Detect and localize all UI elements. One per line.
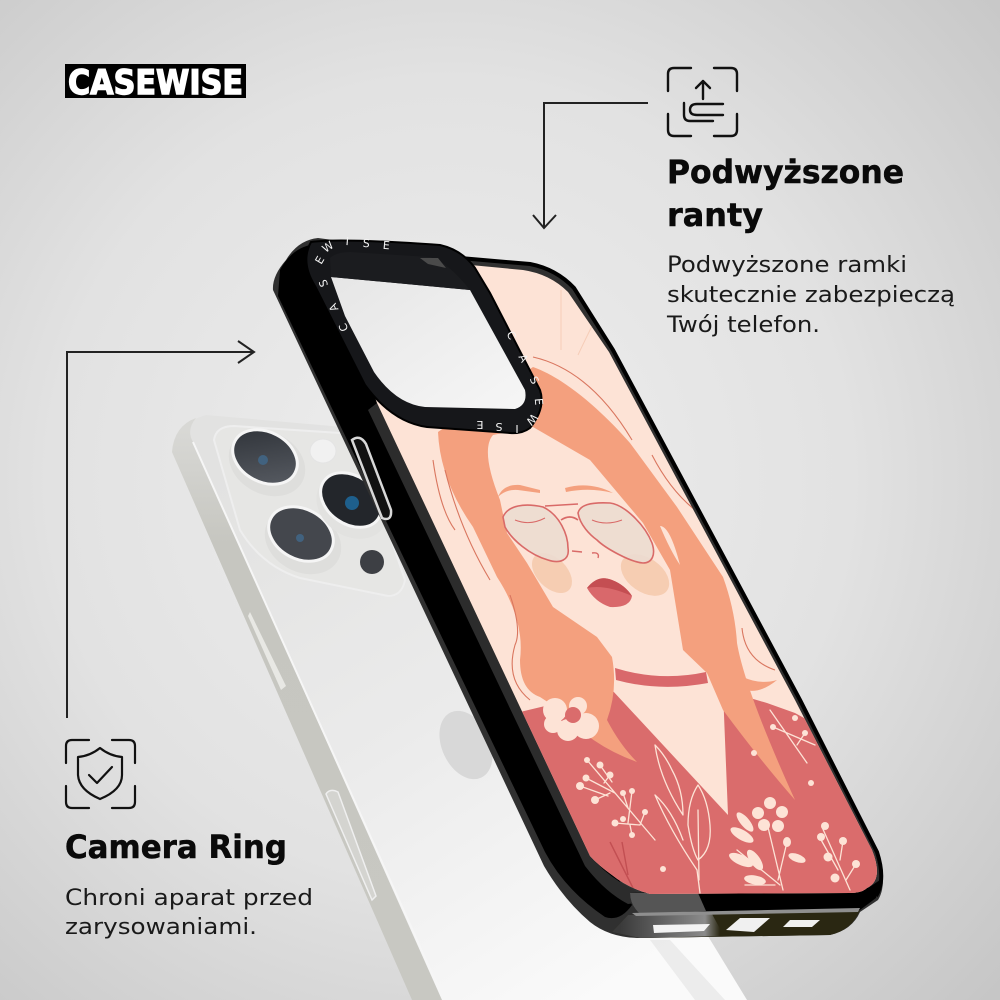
gray lip [630, 893, 706, 914]
side slot [402, 529, 470, 654]
sensor [360, 550, 384, 574]
bottom wall [612, 910, 860, 938]
ring lettering [313, 235, 545, 435]
lower light edge [630, 880, 880, 914]
glasses [503, 503, 654, 563]
text: raised edges description: skutecznie zabezpieczą [667, 283, 955, 308]
dress botanical sprigs [580, 710, 856, 893]
ring lettering: S [316, 278, 331, 289]
top and right black edge [460, 258, 881, 896]
text: raised edges description [666, 253, 955, 338]
heading: Podwyższone ranty: Podwyższone [667, 153, 904, 191]
ring lettering: E [532, 398, 545, 406]
lips [587, 578, 632, 607]
ring lettering: W [320, 239, 336, 256]
hair wisp [746, 678, 777, 691]
heading: Podwyższone ranty: ranty [667, 196, 763, 234]
ear and gap [660, 526, 680, 565]
ring lettering: C [504, 329, 519, 342]
dress [500, 690, 880, 900]
illustration [376, 265, 877, 894]
ring lettering: E [313, 254, 327, 267]
arrow: to raised edges [533, 103, 648, 228]
ring hole [331, 277, 526, 409]
dark stems [610, 842, 633, 888]
side button lower [326, 790, 376, 900]
ring lettering: A [516, 352, 531, 365]
left flower on dress [543, 697, 599, 741]
apple logo [429, 702, 503, 788]
choker [615, 668, 708, 687]
icon: raised edge [668, 68, 737, 136]
eyebrows [498, 485, 540, 497]
camera plateau [214, 426, 405, 596]
side button upper [248, 612, 286, 690]
icon: shield with check [66, 740, 135, 808]
flash [310, 439, 336, 463]
text: camera ring description: Chroni aparat przed [65, 886, 313, 911]
action button [352, 438, 391, 519]
arrow: to camera ring [67, 341, 254, 718]
nose [572, 551, 598, 558]
ring lettering: S [495, 420, 502, 433]
port holes [653, 924, 710, 933]
ring lettering: I [345, 235, 349, 248]
ring lettering: W [523, 411, 540, 428]
lens top [217, 417, 317, 509]
white phone back [172, 415, 747, 1000]
cheeks [532, 556, 572, 593]
ring lettering: I [515, 422, 519, 435]
metal side band [172, 418, 442, 1000]
text: raised edges description: Podwyższone ramki [667, 253, 907, 278]
ring lettering: S [527, 374, 541, 387]
faint background lines [561, 290, 595, 355]
hair [438, 367, 795, 800]
text: camera ring description: zarysowaniami. [65, 915, 257, 940]
ring lettering: S [362, 237, 370, 250]
sprig buds and leaves [576, 715, 860, 886]
ring lettering: E [476, 418, 483, 431]
lens right [304, 460, 400, 552]
heading: Camera Ring: Camera Ring [65, 828, 287, 866]
hair lines [433, 357, 775, 700]
text: camera ring description [65, 886, 313, 940]
brand logo: CASEWISE [68, 63, 243, 103]
text: raised edges description: Twój telefon. [666, 313, 820, 338]
ring lettering: E [382, 239, 390, 252]
outer shell [273, 238, 883, 938]
closed eyes [515, 518, 622, 523]
lens bottom [253, 495, 353, 587]
black inner band [278, 244, 632, 918]
dark rim [368, 403, 660, 904]
heading: Podwyższone ranty [667, 153, 904, 234]
black case [273, 238, 883, 938]
camera ring [306, 235, 545, 435]
bottom shadow strip [650, 940, 725, 1000]
ring lettering: A [326, 301, 341, 314]
inner top wall [330, 252, 470, 290]
ring lettering: C [336, 321, 351, 333]
